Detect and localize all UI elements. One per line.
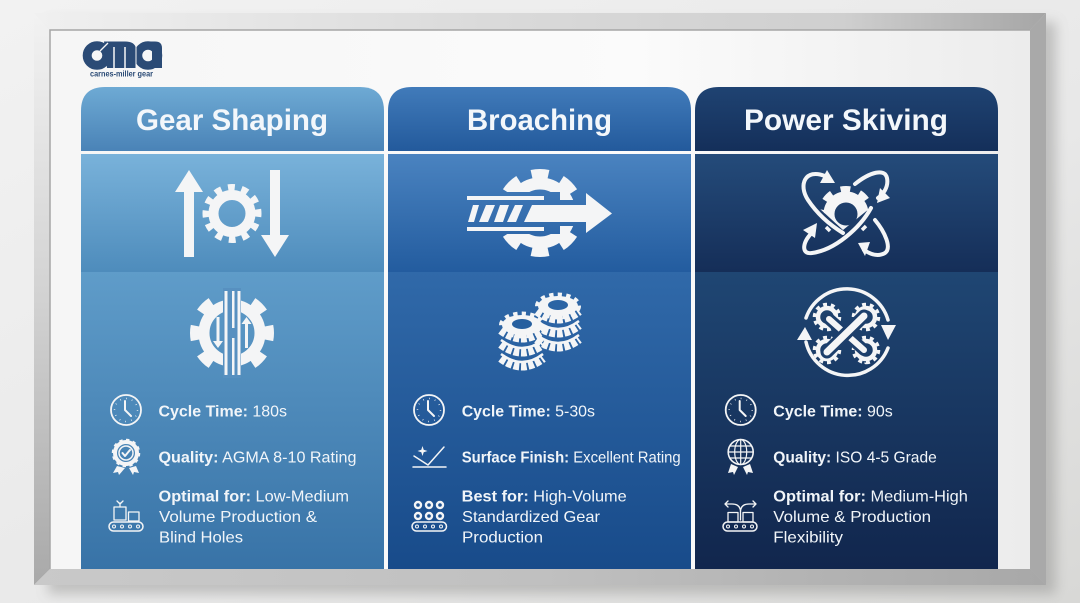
icon: clock bbox=[111, 395, 141, 425]
metric: best use bbox=[412, 488, 627, 546]
metric: cycle time bbox=[111, 395, 287, 425]
icon: conveyor with boxes bbox=[109, 501, 143, 531]
header background bbox=[81, 87, 384, 151]
icon: gear with orbiting arrows bbox=[803, 170, 890, 256]
metric: cycle time bbox=[414, 395, 595, 425]
process icon band bbox=[695, 154, 998, 272]
metric: quality: Quality: AGMA 8-10 Rating bbox=[158, 450, 356, 466]
heading: Gear Shaping bbox=[136, 104, 328, 137]
icon: gear with internal shaping arrows bbox=[195, 288, 269, 378]
icon: broach arrow through gear bbox=[467, 174, 612, 252]
process icon band bbox=[388, 154, 691, 272]
icon: clock bbox=[414, 395, 444, 425]
heading: Broaching bbox=[467, 104, 612, 137]
panel: broaching bbox=[388, 87, 691, 569]
metric: quality bbox=[113, 440, 356, 475]
metric: best use: Standardized Gear bbox=[462, 509, 601, 526]
icon: surface check with sparkle bbox=[413, 446, 446, 467]
metric: optimal use: Optimal for: Low-Medium bbox=[158, 488, 349, 506]
metric: optimal use: Flexibility bbox=[773, 530, 843, 546]
header background bbox=[388, 87, 691, 151]
panel: gear shaping bbox=[81, 87, 384, 569]
metric: cycle time: Cycle Time: 90s bbox=[773, 404, 893, 420]
metric: cycle time bbox=[726, 395, 893, 425]
icon: clock bbox=[726, 395, 756, 425]
metric: best use: Production bbox=[462, 530, 543, 546]
front gear stack bbox=[501, 314, 543, 366]
metric: surface finish: Surface Finish: Excellent Rating bbox=[462, 450, 681, 466]
metric: optimal use: Volume & Production bbox=[773, 509, 931, 526]
metric: quality: Quality: ISO 4-5 Grade bbox=[773, 450, 937, 466]
back gear stack bbox=[537, 295, 579, 347]
logo: carnes-miller gear bbox=[87, 42, 162, 78]
icon: quality rosette bbox=[113, 440, 139, 475]
heading: Power Skiving bbox=[744, 104, 948, 137]
metric: cycle time: Cycle Time: 5-30s bbox=[462, 404, 595, 420]
metric: cycle time: Cycle Time: 180s bbox=[158, 404, 287, 420]
metric: quality bbox=[728, 440, 937, 475]
metric: optimal use: Optimal for: Medium-High bbox=[773, 488, 968, 506]
metric: optimal use bbox=[723, 488, 968, 546]
details background bbox=[388, 272, 691, 569]
metric: optimal use bbox=[109, 488, 349, 546]
icon: conveyor with diverging arrows bbox=[723, 501, 757, 531]
metric: best use: Best for: High-Volume bbox=[462, 488, 627, 506]
logo: carnes-miller gear: carnes-miller gear bbox=[90, 70, 153, 78]
icon: up and down arrows around gear bbox=[175, 170, 289, 257]
metric: surface finish bbox=[413, 446, 681, 467]
metric: optimal use: Blind Holes bbox=[159, 530, 243, 546]
details background bbox=[81, 272, 384, 569]
process icon band bbox=[81, 154, 384, 272]
header background bbox=[695, 87, 998, 151]
icon: stacked gears bbox=[501, 295, 579, 366]
icon: crossed gears in circular arrows bbox=[797, 289, 896, 375]
details background bbox=[695, 272, 998, 569]
metric: optimal use: Volume Production & bbox=[159, 509, 317, 526]
icon: conveyor with gears bbox=[412, 502, 446, 531]
icon: globe rosette bbox=[728, 440, 753, 475]
panel: power skiving bbox=[695, 87, 998, 569]
